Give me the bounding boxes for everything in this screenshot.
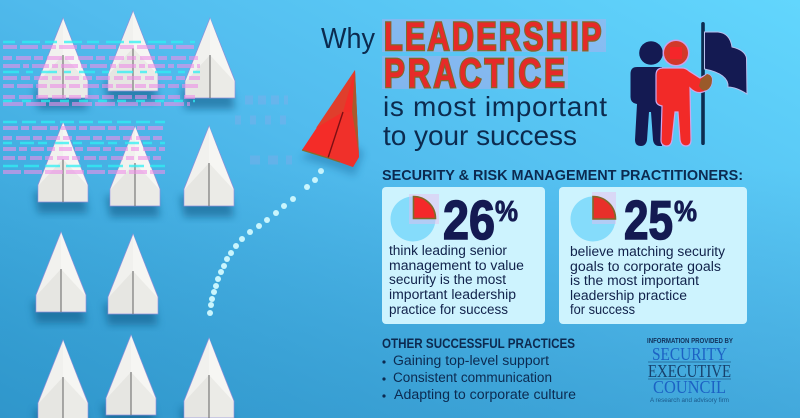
text: 25 percent description: for success: [570, 302, 635, 317]
panel: 25 percent stat: [559, 187, 747, 324]
title: PRACTICE: PRACTICE: [384, 50, 565, 96]
icon: flag: [701, 22, 747, 145]
logo: Security Executive Council: INFORMATION PROVIDED BY: [647, 336, 733, 345]
text: 26 percent description: security is the most: [389, 272, 506, 287]
title: Why: Why: [321, 23, 375, 55]
text: 26 percent description: management to value: [389, 258, 524, 273]
title: to your success: to your success: [383, 120, 577, 151]
stat: 26 percent: %: [495, 196, 518, 228]
stat: 25 percent: %: [674, 196, 697, 228]
title: is most important: is most important: [383, 91, 607, 122]
icon: dark person: [630, 41, 663, 146]
list items: [382, 353, 576, 402]
text: 25 percent description: [570, 244, 725, 317]
logo: Security Executive Council: EXECUTIVE: [648, 361, 731, 381]
dotted flight path: [207, 168, 324, 316]
logo: Security Executive Council: SECURITY: [652, 344, 727, 364]
glitch bands over the upper planes: [3, 42, 292, 172]
text: 25 percent description: leadership practice: [570, 288, 687, 303]
text: 25 percent description: goals to corporate goals: [570, 259, 721, 274]
logo: Security Executive Council: [647, 336, 733, 404]
stat: 26 percent: 26: [443, 189, 495, 251]
icon: red paper plane: [300, 70, 364, 176]
text: 25 percent description: is the most important: [570, 273, 699, 288]
text: 26 percent description: practice for success: [389, 302, 508, 317]
list items: Consistent communication: [393, 370, 552, 385]
icon: red person: [656, 40, 712, 146]
text: 26 percent description: think leading senior: [389, 243, 508, 258]
logo: Security Executive Council: A research and advisory firm: [650, 397, 729, 404]
logo: Security Executive Council: COUNCIL: [653, 377, 726, 397]
text: 25 percent description: believe matching security: [570, 244, 725, 259]
section heading: SECURITY & RISK MANAGEMENT PRACTITIONERS:: [382, 167, 743, 184]
white paper planes formation: [32, 11, 235, 418]
text: 26 percent description: [389, 243, 524, 317]
pie chart: 25 percent: [570, 192, 616, 242]
list items: Adapting to corporate culture: [394, 387, 576, 402]
title: LEADERSHIP: LEADERSHIP: [384, 14, 601, 59]
other successful practices list: [382, 335, 576, 402]
title: [321, 14, 607, 151]
stat: 25 percent: 25: [624, 189, 673, 251]
pie chart: 26 percent: [390, 194, 439, 242]
list heading: OTHER SUCCESSFUL PRACTICES: [382, 335, 575, 351]
text: 26 percent description: important leadership: [389, 287, 516, 302]
icon: two people and flag: [630, 22, 747, 146]
list items: Gaining top-level support: [393, 353, 549, 368]
panel: 26 percent stat: [382, 187, 545, 324]
